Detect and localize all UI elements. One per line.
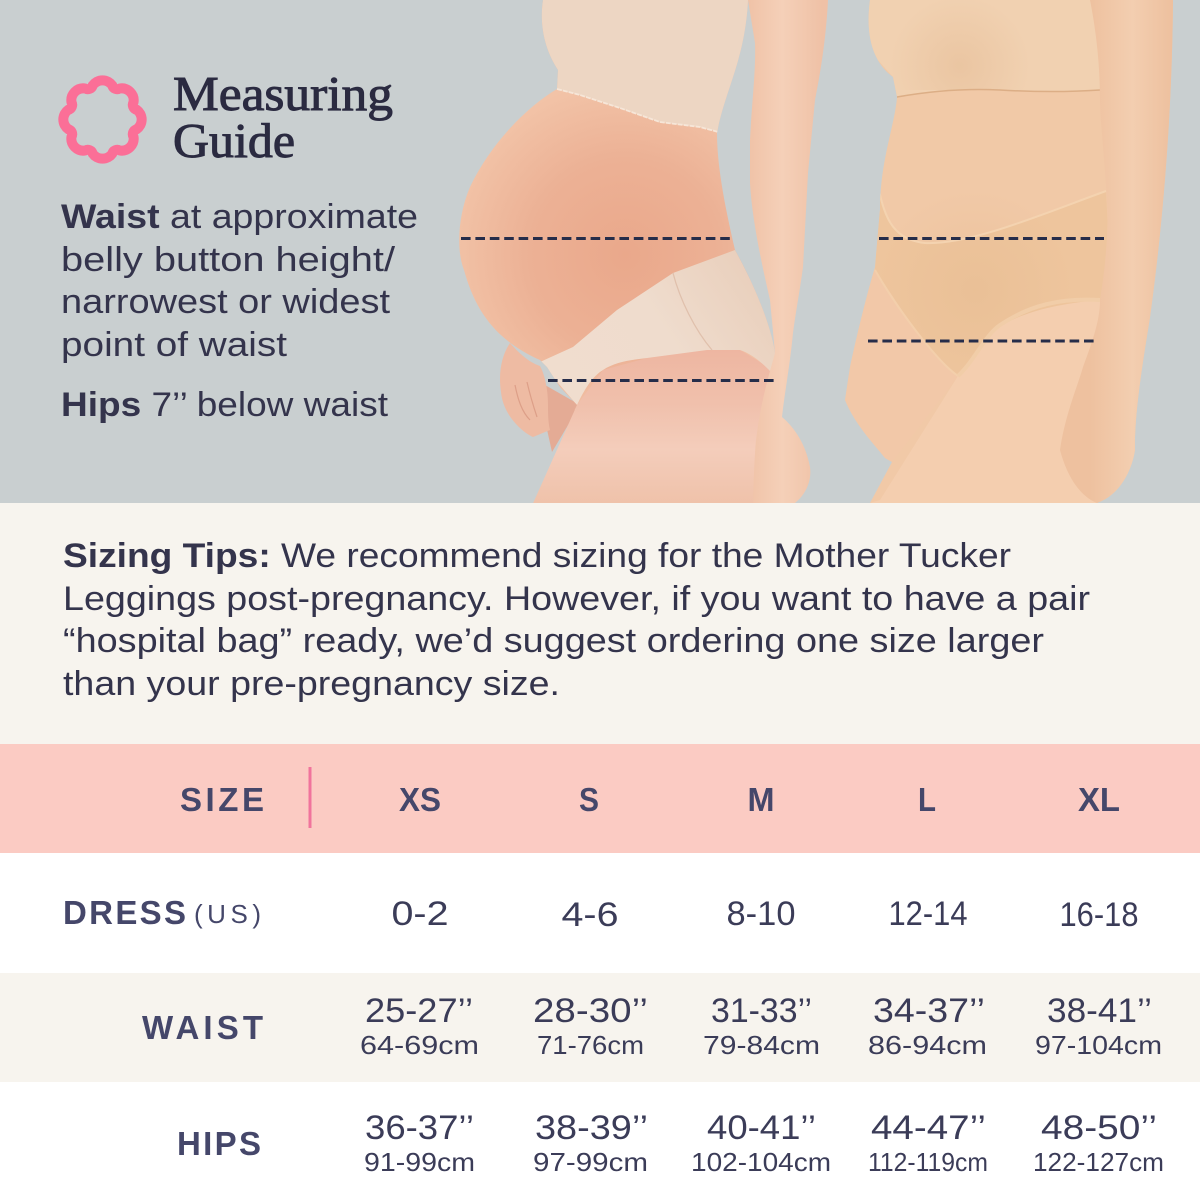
table row: hips: 122-127cm bbox=[1033, 1147, 1164, 1177]
title: Measuring bbox=[173, 66, 393, 121]
arm and hand bbox=[748, 0, 828, 503]
arm and hand bbox=[1060, 0, 1180, 503]
sizing tips text bbox=[63, 537, 1090, 703]
table row: waist: 71-76cm bbox=[537, 1030, 644, 1060]
table row: waist: 28-30’’ bbox=[533, 992, 648, 1030]
front leg bbox=[956, 302, 1100, 380]
table row: waist: WAIST bbox=[142, 1009, 263, 1046]
bra bbox=[860, 0, 1100, 97]
table row: dress: 12-14 bbox=[888, 895, 968, 933]
table row: hips: 112-119cm bbox=[868, 1147, 988, 1177]
header labels: S bbox=[579, 781, 599, 818]
text block: waist and hips instructions bbox=[61, 198, 418, 424]
table row: hips: 40-41’’ bbox=[707, 1109, 816, 1147]
header labels: XS bbox=[399, 781, 441, 818]
waist measuring line bbox=[879, 237, 1104, 240]
table row: dress: 0-2 bbox=[392, 895, 448, 933]
hips measuring line bbox=[868, 340, 1095, 342]
table row: dress bbox=[0, 853, 1200, 973]
text block: waist and hips instructions: point of waist bbox=[61, 326, 288, 364]
table header row bbox=[0, 744, 1200, 853]
header labels bbox=[180, 781, 1120, 818]
table row: waist: 34-37’’ bbox=[873, 992, 985, 1030]
text block: waist and hips instructions: Hips 7’’ below waist bbox=[61, 386, 389, 424]
table row: hips: 44-47’’ bbox=[871, 1109, 986, 1147]
table row: dress: 8-10 bbox=[726, 895, 796, 933]
waist measuring line bbox=[461, 237, 730, 240]
table row: dress: 16-18 bbox=[1060, 896, 1138, 934]
table row: hips: 97-99cm bbox=[533, 1147, 648, 1177]
sizing tips text: Sizing Tips: We recommend sizing for the Mother Tucker bbox=[63, 537, 1011, 575]
table row: hips: 38-39’’ bbox=[535, 1109, 648, 1147]
far leg bbox=[545, 385, 580, 452]
torso and leg bbox=[450, 0, 790, 510]
header labels: L bbox=[918, 781, 936, 818]
table row: hips: 36-37’’ bbox=[365, 1109, 474, 1147]
bralette bbox=[535, 0, 750, 133]
table row: hips bbox=[0, 1082, 1200, 1200]
table row: dress: DRESS bbox=[63, 894, 186, 931]
table row: hips: 102-104cm bbox=[691, 1147, 831, 1177]
header labels: M bbox=[748, 781, 774, 818]
sizing tips text: Leggings post-pregnancy. However, if you want to have a pair bbox=[63, 580, 1090, 618]
left-side leg bbox=[845, 270, 958, 462]
high-waist brief bbox=[875, 190, 1110, 376]
table row: hips: HIPS bbox=[177, 1125, 261, 1162]
table row: waist: 79-84cm bbox=[703, 1030, 820, 1060]
table row: dress: 4-6 bbox=[562, 896, 618, 934]
table row: hips: 48-50’’ bbox=[1041, 1109, 1157, 1147]
panel: sizing tips bbox=[0, 503, 1200, 744]
table row: dress: (US) bbox=[194, 899, 261, 929]
title: Guide bbox=[173, 113, 295, 168]
table row: waist: 86-94cm bbox=[868, 1030, 987, 1060]
hips measuring line bbox=[548, 379, 775, 382]
header labels: XL bbox=[1078, 781, 1120, 818]
table row: waist: 38-41’’ bbox=[1047, 992, 1152, 1030]
panel: measuring guide background bbox=[0, 0, 1200, 503]
hand bbox=[500, 343, 550, 437]
text block: waist and hips instructions: Waist at approximate bbox=[61, 198, 418, 236]
title bbox=[173, 66, 393, 168]
table row: waist: 64-69cm bbox=[360, 1030, 479, 1060]
text block: waist and hips instructions: narrowest or widest bbox=[61, 283, 391, 321]
photo: non-pregnant figure with measuring lines bbox=[840, 0, 1180, 505]
photo: pregnant figure with measuring lines bbox=[450, 0, 828, 510]
sizing tips text: than your pre-pregnancy size. bbox=[63, 665, 560, 703]
table row: waist: 25-27’’ bbox=[365, 992, 473, 1030]
sizing tips text: “hospital bag” ready, we’d suggest ordering one size larger bbox=[63, 622, 1044, 660]
header labels: SIZE bbox=[180, 781, 264, 818]
table row: waist: 97-104cm bbox=[1035, 1030, 1162, 1060]
table row: waist bbox=[0, 973, 1200, 1082]
briefs bbox=[540, 250, 778, 405]
text block: waist and hips instructions: belly button height/ bbox=[61, 241, 396, 279]
icon: pink scalloped flower outline bbox=[63, 80, 142, 159]
table row: waist: 31-33’’ bbox=[711, 992, 812, 1030]
table row: hips: 91-99cm bbox=[364, 1147, 475, 1177]
